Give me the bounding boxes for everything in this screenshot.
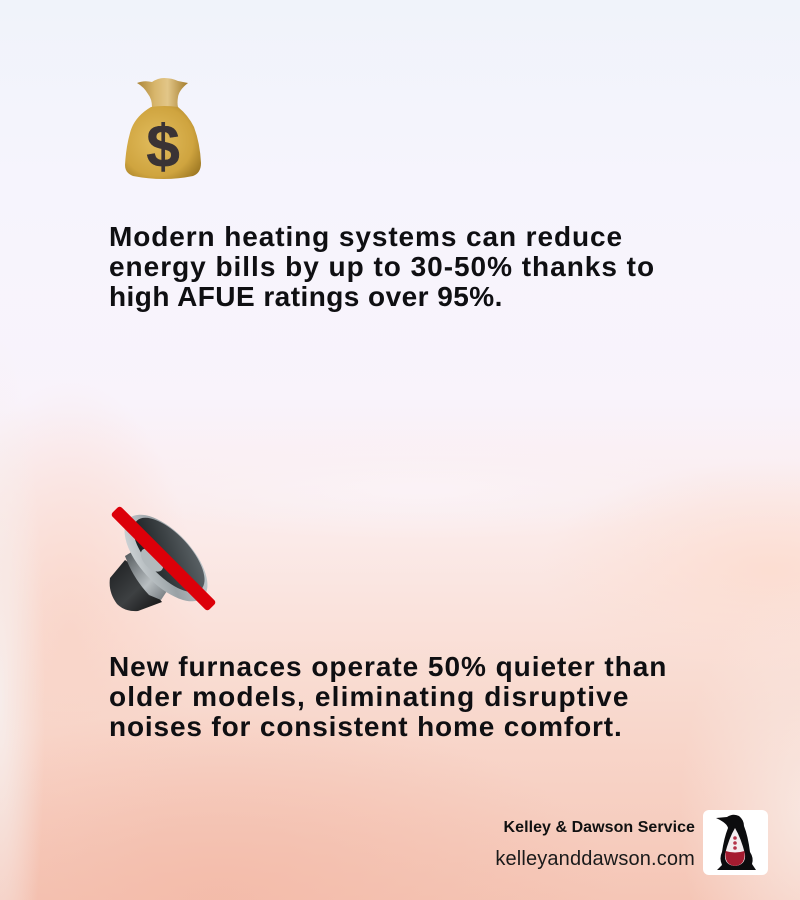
footer brand name: Kelley & Dawson Service: [504, 819, 695, 836]
text: quiet operation: New furnaces operate 50% quieter than: [109, 651, 667, 682]
text: energy savings: high AFUE ratings over 95%.: [109, 281, 503, 312]
text: quiet operation: noises for consistent home comfort.: [109, 711, 623, 742]
text: quiet operation: [109, 651, 667, 742]
text: energy savings: [109, 221, 655, 312]
text: energy savings: Modern heating systems can reduce: [109, 221, 623, 252]
text: quiet operation: older models, eliminating disruptive: [109, 681, 630, 712]
text: energy savings: energy bills by up to 30-50% thanks to: [109, 251, 655, 282]
footer website: kelleyanddawson.com: [495, 848, 695, 870]
icon: muted speaker: [110, 506, 216, 612]
logo: penguin badge: [703, 810, 768, 875]
icon: money bag: $: [146, 113, 180, 180]
icon: money bag: [125, 78, 201, 180]
